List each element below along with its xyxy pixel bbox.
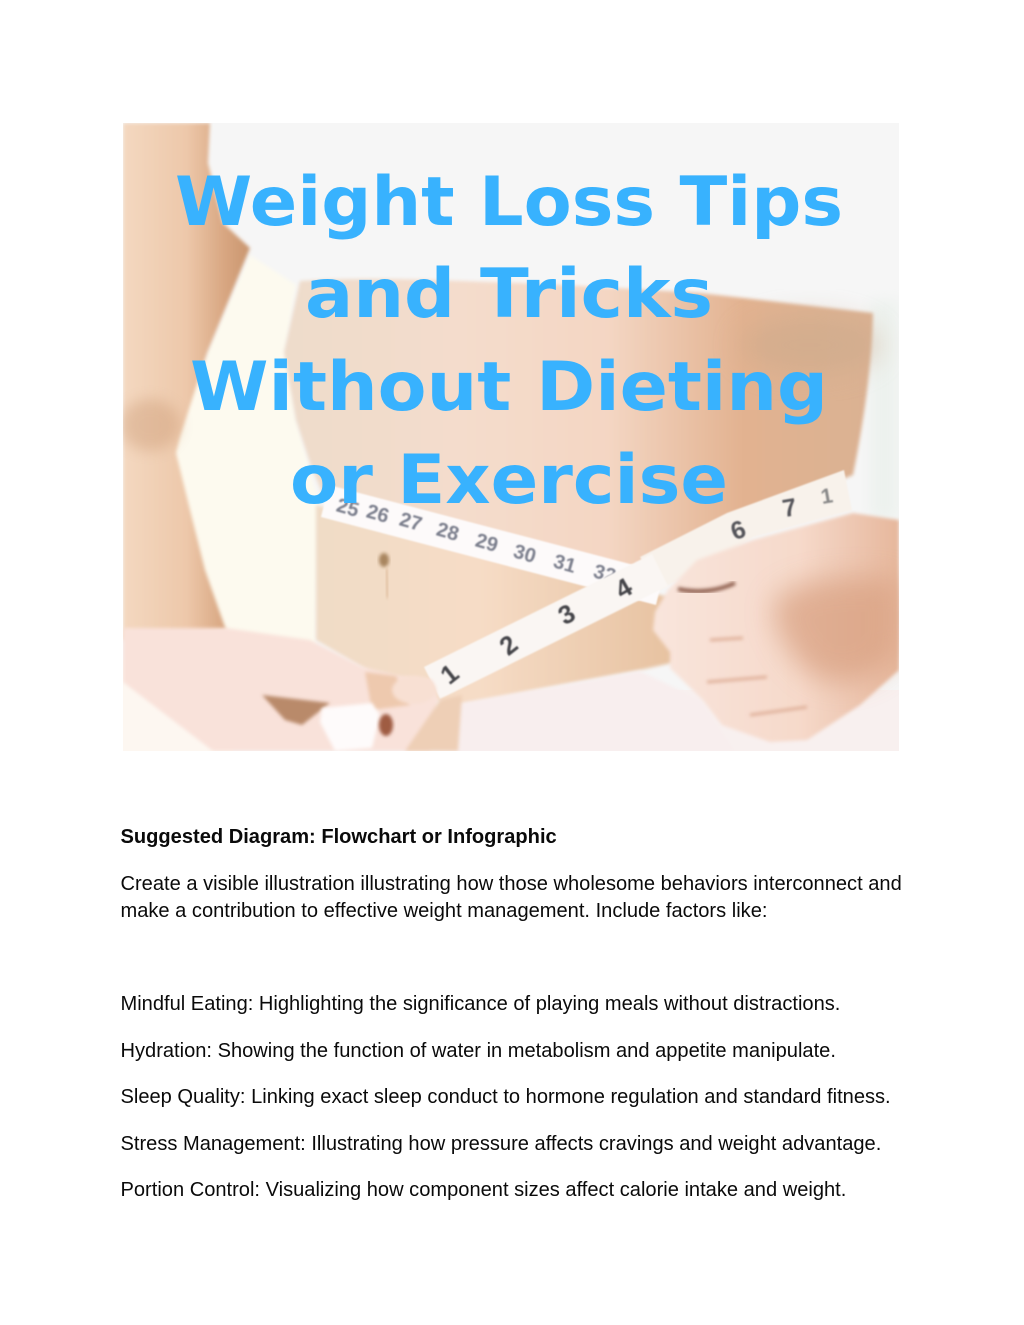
hero image: waist measurement photo with title — [123, 123, 899, 751]
measuring tape lower: 1 — [435, 658, 464, 690]
lower belly — [316, 505, 680, 705]
measuring tape upper: 32 — [591, 561, 618, 588]
item: portion control: Portion Control: Visualizing how component sizes affect calorie intake and weight. — [120, 1179, 846, 1201]
measuring tape lower: 3 — [553, 598, 580, 631]
item: stress management: Stress Management: Illustrating how pressure affects cravings and weight advantage. — [120, 1133, 881, 1155]
intro paragraph: Create a visible illustration illustrating how those wholesome behaviors interconnect and — [120, 873, 902, 895]
measuring tape lower — [424, 559, 649, 699]
measuring tape upper: 31 — [551, 551, 578, 578]
navel — [379, 553, 389, 598]
left arm — [120, 123, 250, 640]
title text — [175, 163, 843, 520]
measuring tape upper: 26 — [364, 501, 391, 528]
intro paragraph: make a contribution to effective weight management. Include factors like: — [120, 900, 767, 922]
measuring tape upper: 1 — [819, 484, 835, 509]
measuring tape upper: 7 — [780, 493, 799, 523]
measuring tape upper: 28 — [434, 519, 461, 546]
intro paragraph — [120, 873, 902, 922]
background and white top — [210, 123, 899, 690]
measuring tape lower: 2 — [494, 629, 523, 661]
title text: and Tricks — [305, 255, 713, 334]
title text: or Exercise — [290, 441, 728, 520]
item: mindful eating: Mindful Eating: Highlighting the significance of playing meals without distractions. — [120, 993, 840, 1015]
heading: suggested diagram: Suggested Diagram: Flowchart or Infographic — [120, 826, 557, 848]
pale lower left corner — [123, 660, 233, 751]
measuring tape upper: 6 — [727, 515, 750, 546]
right hand — [653, 513, 899, 742]
measuring tape upper: 27 — [397, 509, 424, 536]
white trousers — [508, 670, 638, 695]
item: sleep quality: Sleep Quality: Linking exact sleep conduct to hormone regulation and standard fitness. — [120, 1086, 891, 1108]
title text: Weight Loss Tips — [175, 163, 843, 242]
title text: Without Dieting — [190, 348, 828, 427]
measuring tape lower: 4 — [610, 571, 638, 605]
left hand — [123, 628, 462, 751]
measuring tape upper — [321, 470, 852, 605]
pale right edge — [880, 309, 889, 511]
measuring tape upper: 30 — [511, 541, 538, 568]
item: hydration: Hydration: Showing the function of water in metabolism and appetite manipulate. — [120, 1040, 836, 1062]
pale lower background — [440, 690, 899, 751]
measuring tape upper: 25 — [334, 495, 361, 522]
upper belly — [284, 279, 880, 578]
cream clothing on left — [170, 255, 318, 650]
measuring tape upper: 29 — [473, 530, 500, 557]
